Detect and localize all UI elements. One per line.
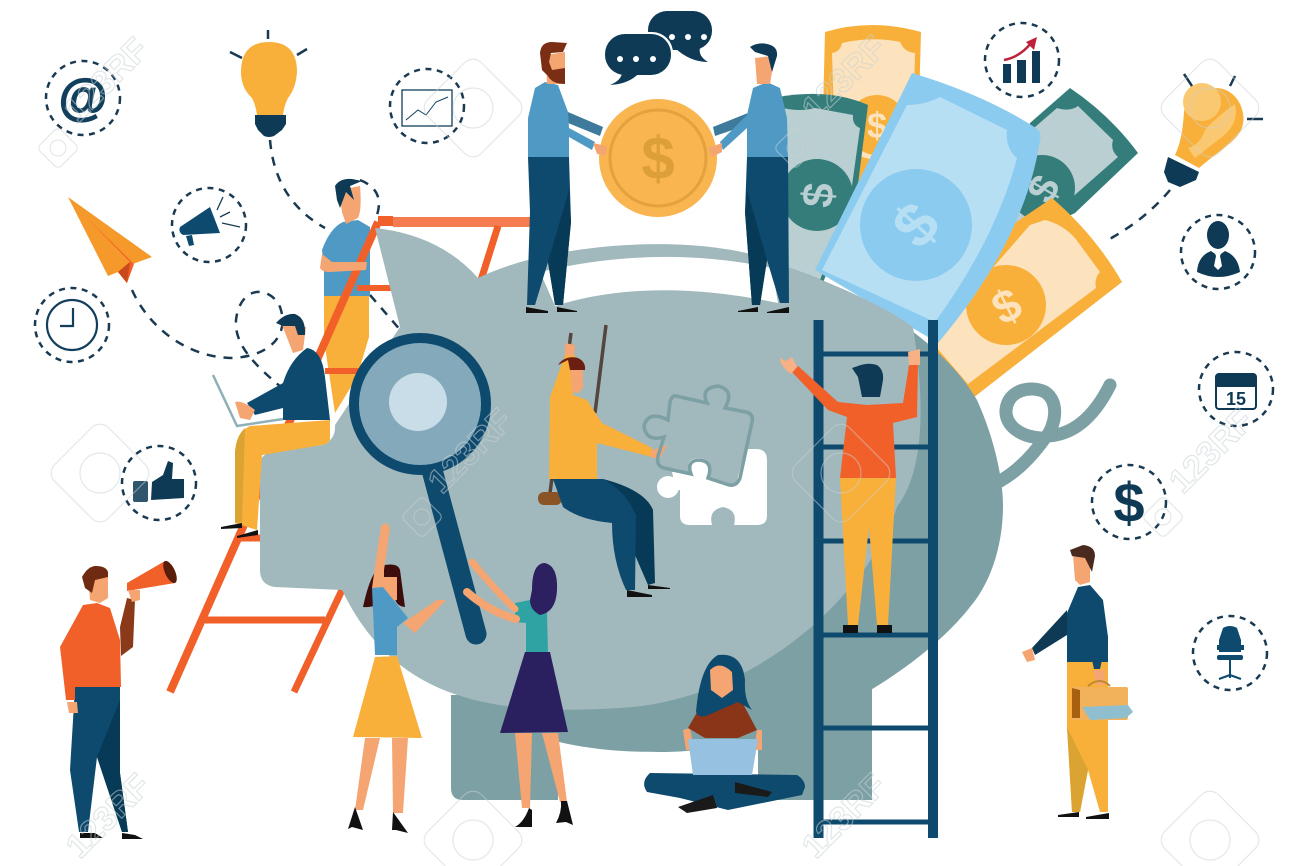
icon: clock [35, 288, 109, 362]
orange banknote right: $ [983, 277, 1030, 335]
coin [599, 99, 717, 217]
puzzle pieces [644, 386, 767, 525]
coin: $ [641, 125, 675, 192]
person: woman in navy skirt [467, 562, 573, 827]
watermarks: 123RF [795, 29, 894, 128]
person: man climbing ladder [780, 349, 920, 633]
icon: calendar [1199, 352, 1273, 426]
icon: thumbs up [122, 446, 196, 520]
orange banknote right [930, 198, 1122, 398]
coin slot [540, 257, 778, 306]
pig legs [451, 680, 872, 800]
person: man holding coin [708, 43, 789, 313]
icon: calendar: 15 [1226, 389, 1246, 409]
icon: dollar: $ [1113, 471, 1145, 534]
dashed path from right bulb [1106, 190, 1170, 241]
icon: megaphone [172, 188, 246, 262]
navy ladder [818, 320, 933, 838]
green banknote left: $ [793, 181, 844, 209]
watermarks: 123RF [57, 31, 156, 130]
orange ladder [170, 221, 530, 692]
arm of man on ladder [320, 254, 367, 272]
icon: right light bulb [1164, 74, 1263, 187]
green banknote left [770, 94, 868, 290]
icon: dollar [1092, 465, 1166, 539]
speech bubbles [604, 11, 712, 85]
dashed path near ear [370, 295, 402, 332]
orange banknote top: $ [867, 105, 887, 146]
green banknote right: $ [1017, 167, 1069, 211]
green banknote right [1000, 88, 1138, 250]
person: man with megaphone [60, 559, 180, 839]
dashed ring around top man head [360, 180, 379, 215]
person: bearded man holding coin [526, 42, 607, 313]
watermarks: 123RF [59, 767, 158, 866]
dashed path from left bulb [270, 140, 325, 228]
icon: at sign: @ [59, 69, 107, 125]
magnifying glass [354, 338, 486, 634]
dashed path from paper plane [132, 290, 283, 388]
icon: at sign [46, 61, 120, 135]
person: man on swing [538, 325, 670, 597]
icon: office chair [1193, 616, 1267, 690]
orange banknote top [822, 25, 921, 200]
icon: paper plane [68, 197, 152, 283]
person: woman in yellow skirt [348, 523, 446, 833]
person: man on orange ladder [322, 179, 370, 413]
person: woman sitting with laptop [644, 655, 805, 813]
person: man with laptop [213, 314, 330, 538]
icon: businessman [1181, 215, 1255, 289]
icon: left light bulb [230, 30, 307, 137]
pig tail [1000, 385, 1110, 481]
pig body [260, 228, 1003, 752]
watermarks: 123RF [795, 767, 894, 866]
blue banknote: $ [879, 189, 954, 261]
blue banknote [815, 73, 1040, 343]
watermarks: 123RF [421, 402, 520, 501]
person: man with briefcase [1022, 545, 1133, 819]
watermarks: 123RF [1162, 402, 1261, 501]
icon: chart board [390, 69, 464, 143]
icon: growth chart [985, 23, 1059, 97]
